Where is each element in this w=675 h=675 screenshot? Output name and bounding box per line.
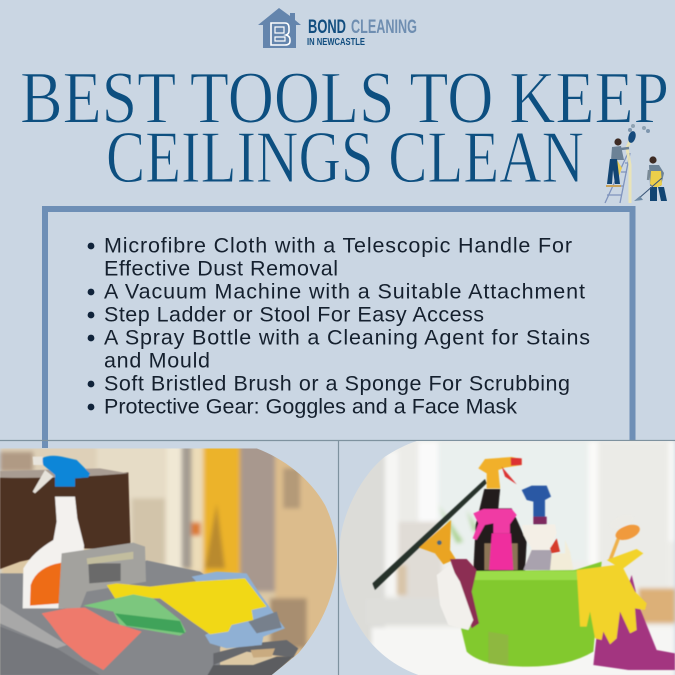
logo xyxy=(258,8,417,48)
bullet list of tools: Microfibre Cloth with a Telescopic Handle For xyxy=(104,234,572,258)
worker with mop xyxy=(634,156,667,201)
coral cloth xyxy=(42,608,142,670)
cart handle xyxy=(58,543,146,608)
yellow gloves xyxy=(577,549,647,644)
cart rim handle xyxy=(213,640,298,665)
bullet list of tools: Soft Bristled Brush or a Sponge For Scrubbing xyxy=(104,372,570,396)
photo: green bucket with cleaning supplies xyxy=(335,438,675,675)
bullet list of tools: Effective Dust Removal xyxy=(104,257,338,281)
bullet list of tools: A Vacuum Machine with a Suitable Attachment xyxy=(104,280,585,304)
photo: cleaning cart with microfibre cloths xyxy=(0,445,342,675)
blue spray bottle xyxy=(522,486,573,570)
bullet list of tools xyxy=(88,234,590,419)
magenta cloth xyxy=(593,575,675,670)
logo wordmark xyxy=(307,17,417,48)
cart bag xyxy=(0,472,131,569)
logo wordmark: IN NEWCASTLE xyxy=(307,37,365,48)
orange brush xyxy=(608,512,642,561)
scrub brush xyxy=(437,559,479,630)
bullet list of tools: Step Ladder or Stool For Easy Access xyxy=(104,303,484,327)
spray bottle xyxy=(23,456,90,608)
title xyxy=(20,58,669,199)
logo wordmark: BOND xyxy=(308,17,346,38)
bullet list of tools: and Mould xyxy=(104,349,210,373)
yellow cloth xyxy=(107,578,267,634)
ladder xyxy=(605,153,630,203)
bullet list of tools: A Spray Bottle with a Cleaning Agent for Stains xyxy=(104,326,590,350)
blurred room background xyxy=(335,438,675,675)
bullet list of tools: Protective Gear: Goggles and a Face Mask xyxy=(104,395,517,419)
spray and dust xyxy=(627,124,650,203)
icon: house logo xyxy=(258,8,301,48)
worker on ladder xyxy=(606,138,629,187)
green cloth xyxy=(83,594,186,636)
logo wordmark: CLEANING xyxy=(351,17,417,38)
green bucket xyxy=(461,562,602,667)
panel: tool list frame xyxy=(45,209,632,448)
black spray bottle xyxy=(473,457,527,572)
icon: cleaners on ladder and mopping xyxy=(605,124,667,203)
blue cloth xyxy=(192,572,285,648)
squeegee xyxy=(372,479,487,590)
bullet markers xyxy=(88,243,94,410)
pink spray bottle xyxy=(473,509,517,570)
cart tray xyxy=(0,560,233,675)
blurred room background xyxy=(0,445,342,675)
